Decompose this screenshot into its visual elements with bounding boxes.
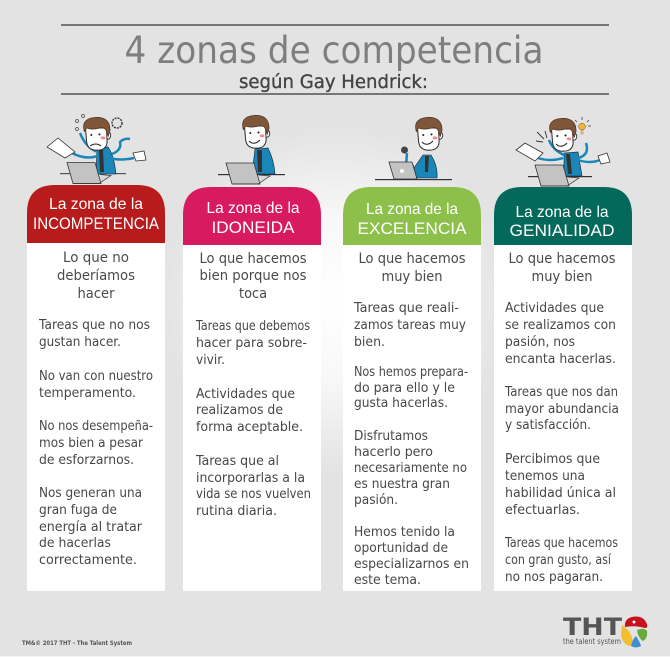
list text: Percibimos que [505, 451, 600, 467]
intro text: Lo que hacemos [358, 251, 466, 267]
list text: bien. [354, 334, 385, 350]
list text: de esforzarnos. [39, 452, 134, 468]
list text: no nos pagaran. [505, 569, 603, 585]
list text: rutina diaria. [196, 503, 277, 519]
header: incompetencia [27, 185, 165, 243]
logo: THT the talent system [563, 613, 647, 648]
header: genialidad: GENIALIDAD [510, 221, 614, 240]
header: incompetencia: La zona de la [49, 196, 143, 213]
list text: tenemos una [505, 468, 585, 484]
list text: Nos generan una [39, 485, 142, 501]
title: 4 zonas de competencia [124, 29, 544, 72]
list text: se realizamos con [505, 317, 616, 333]
intro text [57, 250, 135, 302]
list text: vida se nos vuelven [196, 486, 311, 502]
list text: especializarnos en [354, 556, 469, 572]
logo: THT the talent system: THT [563, 613, 623, 641]
list text: necesariamente no [354, 460, 467, 476]
illustration: office worker with light bulb, genius [516, 117, 610, 186]
header: idoneidad: La zona de la [206, 200, 300, 217]
list text: forma aceptable. [196, 419, 303, 435]
header: excelencia: EXCELENCIA [358, 219, 467, 238]
intro text: Lo que hacemos [200, 251, 306, 267]
intro text: deberíamos [57, 268, 135, 284]
panel: incompetencia [27, 185, 165, 591]
list text: de hacerlas [39, 535, 111, 551]
intro text: Lo que hacemos [508, 251, 616, 267]
logo: THT the talent system: the talent system [563, 637, 621, 646]
list text [38, 317, 153, 568]
intro text: bien porque nos [200, 268, 306, 284]
header: idoneidad [183, 187, 321, 245]
list text: No van con nuestro [39, 368, 153, 384]
list text: hacerlo pero [354, 444, 433, 460]
header: genialidad: La zona de la [516, 204, 609, 221]
intro text [200, 251, 306, 302]
list text [195, 318, 311, 519]
list text: correctamente. [39, 552, 137, 568]
illustration: stressed office worker [47, 114, 146, 184]
list text: gusta hacerlas. [354, 395, 448, 411]
header: idoneidad: IDONEIDA [212, 218, 295, 237]
list text: habilidad única al [505, 485, 616, 501]
list text: incorporarlas a la [196, 470, 305, 486]
title block [61, 24, 609, 95]
list text: es nuestra gran [354, 476, 450, 492]
list text: encanta hacerlas. [505, 351, 616, 367]
list text: pasión, nos [505, 334, 575, 350]
panel: excelencia [343, 187, 481, 591]
footer credit: TM&© 2017 THT - The Talent System [22, 639, 132, 647]
intro text [508, 251, 616, 285]
intro text: hacer [78, 286, 115, 302]
list text: do para ello y le [354, 380, 455, 396]
illustration: office worker at laptop, smiling [218, 115, 285, 184]
list text: vivir. [196, 352, 225, 368]
header: genialidad [494, 187, 632, 245]
list text: mos bien a pesar [39, 435, 143, 451]
list text: zamos tareas muy [354, 317, 466, 333]
list text: oportunidad de [354, 540, 448, 556]
list text: y satisfacción. [505, 417, 591, 433]
intro text: muy bien [382, 269, 442, 285]
list text: hacer para sobre- [196, 335, 307, 351]
list text: este tema. [354, 572, 421, 588]
subtitle: según Gay Hendrick: [239, 71, 428, 93]
list text: energía al tratar [39, 519, 142, 535]
list text: gran fuga de [39, 502, 117, 518]
list text: efectuarlas. [505, 502, 580, 518]
list text: No nos desempeña- [39, 418, 153, 434]
list text: Hemos tenido la [354, 524, 455, 540]
panel: idoneidad [183, 187, 321, 591]
intro text: muy bien [532, 269, 592, 285]
list text: gustan hacer. [39, 334, 121, 350]
list text: mayor abundancia [505, 401, 619, 417]
list text: pasión. [354, 492, 398, 508]
panel: genialidad [494, 187, 632, 591]
list text: Actividades que [505, 300, 604, 316]
list text: Nos hemos prepara- [354, 364, 468, 380]
header: excelencia: La zona de la [366, 201, 458, 218]
list text: Disfrutamos [354, 428, 428, 444]
list text: Actividades que [196, 386, 295, 402]
list text: realizamos de [196, 402, 283, 418]
list text: Tareas que no nos [38, 317, 150, 333]
header: incompetencia: INCOMPETENCIA [33, 214, 160, 233]
list text: Tareas que debemos [195, 318, 310, 334]
list text: Tareas que nos dan [504, 384, 618, 400]
intro text: Lo que no [63, 250, 129, 266]
list text: Tareas que al [195, 453, 279, 469]
list text: con gran gusto, así [505, 552, 612, 568]
intro text [358, 251, 466, 285]
list text: temperamento. [39, 385, 136, 401]
list text: Tareas que hacemos [504, 535, 618, 551]
header: excelencia [343, 187, 481, 245]
icon: coloured flower mark [621, 617, 647, 648]
list text: Tareas que reali- [353, 300, 459, 316]
illustration: office worker with mouse, excellent [375, 117, 452, 180]
list text [504, 300, 619, 585]
list text [353, 300, 469, 588]
intro text: toca [239, 286, 267, 302]
